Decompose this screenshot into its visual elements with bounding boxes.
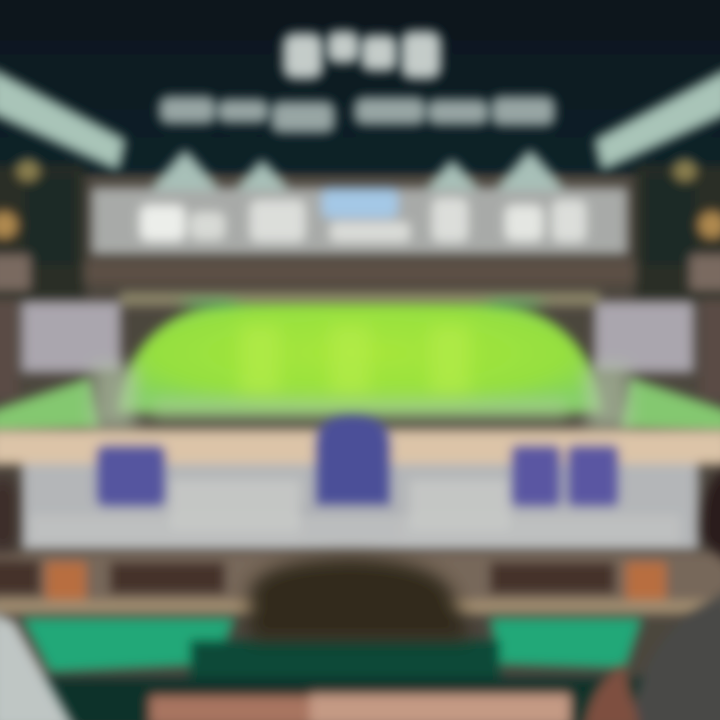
foreground figure bottom left (0, 612, 75, 720)
foreground head left edge (0, 480, 16, 550)
lower stand band (0, 430, 720, 550)
blurred title (160, 32, 554, 132)
central dark figure (250, 558, 470, 640)
upper stand band (92, 150, 627, 254)
stadium roof truss right (595, 68, 720, 300)
green barrier (22, 618, 642, 686)
purple block centre (316, 415, 390, 505)
side grass strips (0, 378, 720, 432)
pitch side panels (92, 365, 630, 430)
purple block right (512, 446, 618, 506)
title line two (160, 97, 554, 132)
stadium roof truss left (0, 68, 125, 300)
pitch stripes (240, 325, 470, 395)
bottom strip (0, 678, 720, 720)
band under stand (85, 260, 635, 284)
side stands (0, 292, 720, 400)
purple block left (97, 446, 165, 506)
foreground person bottom right (582, 465, 720, 720)
dark lower tier (0, 552, 720, 614)
football pitch (118, 298, 602, 412)
title line one (284, 32, 440, 78)
pitch teal top edges (185, 298, 540, 308)
